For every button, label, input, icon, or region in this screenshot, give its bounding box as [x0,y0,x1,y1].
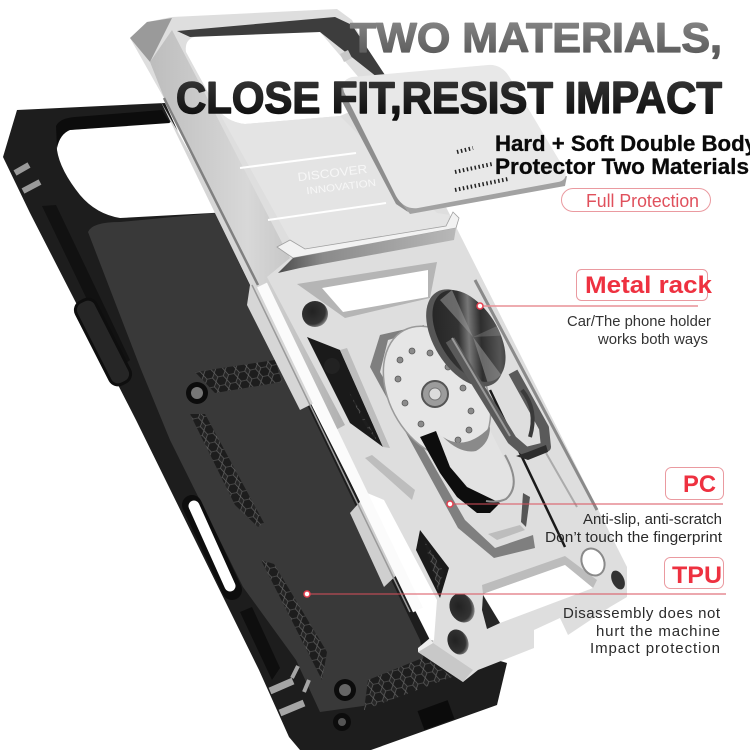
volume button [72,296,134,388]
frame edge line [164,98,258,285]
label box [664,558,724,588]
description: Don’t touch the fingerprint [545,529,723,546]
openings showing back case [307,337,449,598]
ring holder disc [426,289,506,386]
subtitle: Protector Two Materials [495,154,749,179]
plate rim shadow [278,228,456,273]
full protection badge [562,188,710,212]
description: Anti-slip, anti-scratch [583,511,722,528]
lower pill plate [437,430,513,501]
slider grip marks [455,148,508,190]
case outer shell [3,103,507,750]
frame corner tip [130,18,172,62]
camera window cutout [57,122,230,218]
lower corner bevel [418,638,473,682]
case screws [186,382,356,731]
subtitle [495,131,750,179]
leader line [307,593,726,595]
slider top face [343,65,566,208]
lens slider cover [336,65,567,214]
embossed plate text [297,161,377,198]
callout: metal rack: Metal rack [585,272,713,299]
lens plate [215,105,450,249]
camera window [186,32,378,124]
frame top dark lip [177,17,385,77]
leader dot [304,591,310,597]
frame screw holes [302,301,628,658]
callout: TPU: TPU [672,562,722,589]
leader dot [447,501,453,507]
full protection badge: Full Protection [586,191,699,211]
plate rim [277,212,459,258]
X joint bevels [340,348,415,500]
black TPU back case [3,103,507,750]
frame left bar [150,30,345,433]
black slide recess [420,431,500,513]
camera clip [340,50,352,62]
label box [576,270,708,300]
side flaps [160,100,316,410]
callout: PC: PC [683,471,716,498]
frame body [130,9,627,682]
lower white opening [482,556,597,629]
plate crescent [443,427,490,451]
description [563,605,721,657]
ring holder loop [450,340,546,452]
ring inner arc [522,390,533,437]
embossed plate text: DISCOVER [297,162,368,184]
centre hex bolt [422,381,448,407]
octagonal centre bevel [370,325,535,558]
leader dot [477,303,483,309]
description: hurt the machine [596,623,720,640]
leader line [450,503,723,505]
callout: PC [447,468,724,546]
pill outline [486,455,514,502]
slider side edge [336,84,408,212]
title line 2: CLOSE FIT,RESIST IMPACT [176,74,722,123]
embossed plate text: INNOVATION [306,178,377,197]
description [545,511,723,546]
honeycomb grip patches [190,360,452,710]
lower side channel [240,607,280,680]
description: works both ways [597,331,708,348]
callout: TPU [304,558,726,657]
callout: metal rack [477,270,713,348]
description: Car/The phone holder [567,313,711,330]
title line 1: TWO MATERIALS, [350,14,722,61]
top window frame [297,262,437,318]
side channel [42,205,130,368]
bottom connector [418,700,454,730]
description [567,313,711,348]
thin side lines [475,280,597,547]
label box [666,468,724,500]
plate rivets [395,348,474,443]
plate grooves [240,153,386,220]
lower side stripes [270,666,309,713]
side slot [192,505,232,590]
rotating plate [362,308,512,476]
title [176,14,722,123]
bright long highlight [262,285,418,610]
upper side stripes [15,165,40,191]
subtitle: Hard + Soft Double Body [495,131,750,156]
description: Impact protection [590,640,720,657]
description: Disassembly does not [563,605,721,622]
case back face [88,213,425,712]
case top edge lip [56,110,170,148]
silver metal frame [130,9,628,682]
leader line [480,305,698,307]
